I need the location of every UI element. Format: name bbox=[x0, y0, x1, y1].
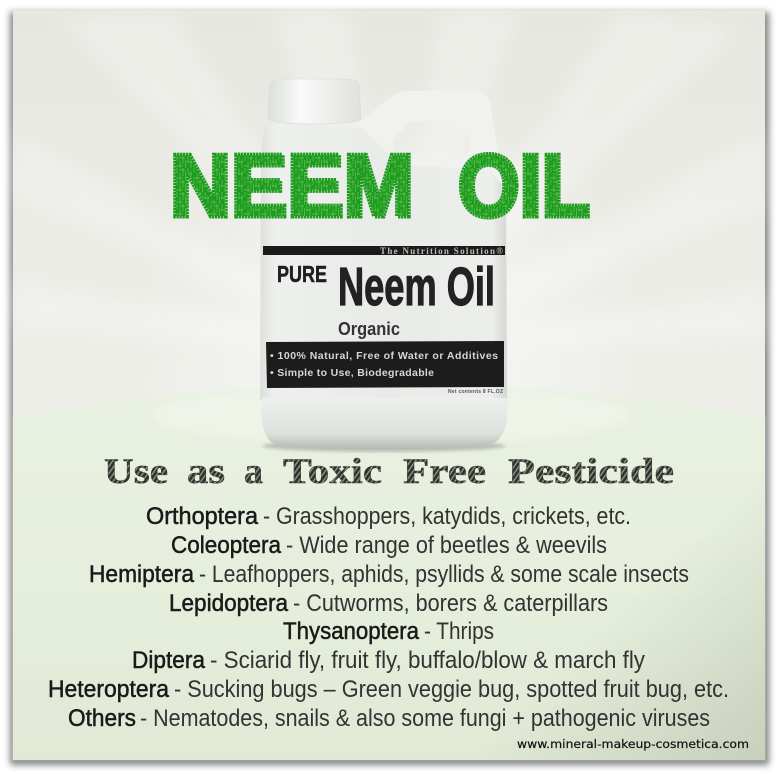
list line: Thysanoptera bbox=[283, 618, 494, 645]
list line: Heteroptera: Heteroptera bbox=[48, 676, 170, 703]
bottle cap bbox=[268, 79, 361, 124]
list line: Lepidoptera bbox=[169, 590, 608, 617]
list line: Others: Others bbox=[68, 705, 136, 732]
list line: Lepidoptera: - Cutworms, borers & caterpillars bbox=[293, 590, 608, 617]
label black box with features bbox=[266, 341, 504, 388]
heading: Use as a Toxic Free Pesticide: Free bbox=[403, 451, 486, 491]
list line: Hemiptera: - Leafhoppers, aphids, psyllids & some scale insects bbox=[199, 561, 689, 588]
pest list bbox=[48, 503, 729, 732]
label top bar bbox=[263, 246, 505, 256]
heading: Use as a Toxic Free Pesticide bbox=[104, 451, 674, 491]
heading: Use as a Toxic Free Pesticide: Toxic bbox=[283, 451, 382, 491]
title: NEEM OIL: NEEM bbox=[170, 136, 414, 235]
title: NEEM OIL: OIL bbox=[458, 136, 590, 235]
heading: Use as a Toxic Free Pesticide: Use bbox=[104, 451, 168, 491]
label text: Neem Oil: Neem Oil bbox=[338, 257, 495, 317]
list line: Coleoptera bbox=[171, 532, 607, 559]
list line: Orthoptera: Orthoptera bbox=[146, 503, 259, 530]
list line: Coleoptera: - Wide range of beetles & weevils bbox=[286, 532, 607, 559]
label top bar: The Nutrition Solution® bbox=[380, 246, 503, 256]
website credit: www.mineral-makeup-cosmetica.com bbox=[517, 737, 749, 751]
bottle body bbox=[260, 122, 507, 400]
heading: Use as a Toxic Free Pesticide: a bbox=[244, 451, 263, 491]
list line: Diptera: - Sciarid fly, fruit fly, buffalo/blow & march fly bbox=[210, 647, 645, 674]
icon: neem oil bottle bbox=[260, 79, 508, 452]
list line: Heteroptera: - Sucking bugs – Green veggie bug, spotted fruit bug, etc. bbox=[174, 676, 729, 703]
bottle handle bbox=[350, 91, 507, 220]
list line: Others: - Nematodes, snails & also some fungi + pathogenic viruses bbox=[140, 705, 710, 732]
list line: Diptera: Diptera bbox=[132, 647, 206, 674]
list line: Thysanoptera: Thysanoptera bbox=[283, 618, 420, 645]
list line: Lepidoptera: Lepidoptera bbox=[169, 590, 289, 617]
label net contents: Net contents 8 FL.OZ bbox=[448, 389, 503, 395]
list line: Orthoptera bbox=[146, 503, 631, 530]
heading: Use as a Toxic Free Pesticide: Pesticide bbox=[508, 451, 674, 491]
label text: PURE: PURE bbox=[277, 261, 327, 287]
list line: Coleoptera: Coleoptera bbox=[171, 532, 282, 559]
list line: Orthoptera: - Grasshoppers, katydids, crickets, etc. bbox=[263, 503, 631, 530]
list line: Hemiptera: Hemiptera bbox=[89, 561, 195, 588]
list line: Thysanoptera: - Thrips bbox=[424, 618, 494, 645]
title: NEEM OIL bbox=[170, 136, 590, 235]
label text: Organic: Organic bbox=[338, 318, 400, 339]
label black box with features: • 100% Natural, Free of Water or Additives bbox=[270, 350, 498, 362]
bottle base bbox=[261, 398, 508, 449]
heading: Use as a Toxic Free Pesticide: as bbox=[187, 451, 225, 491]
label black box with features: • Simple to Use, Biodegradable bbox=[270, 367, 434, 379]
